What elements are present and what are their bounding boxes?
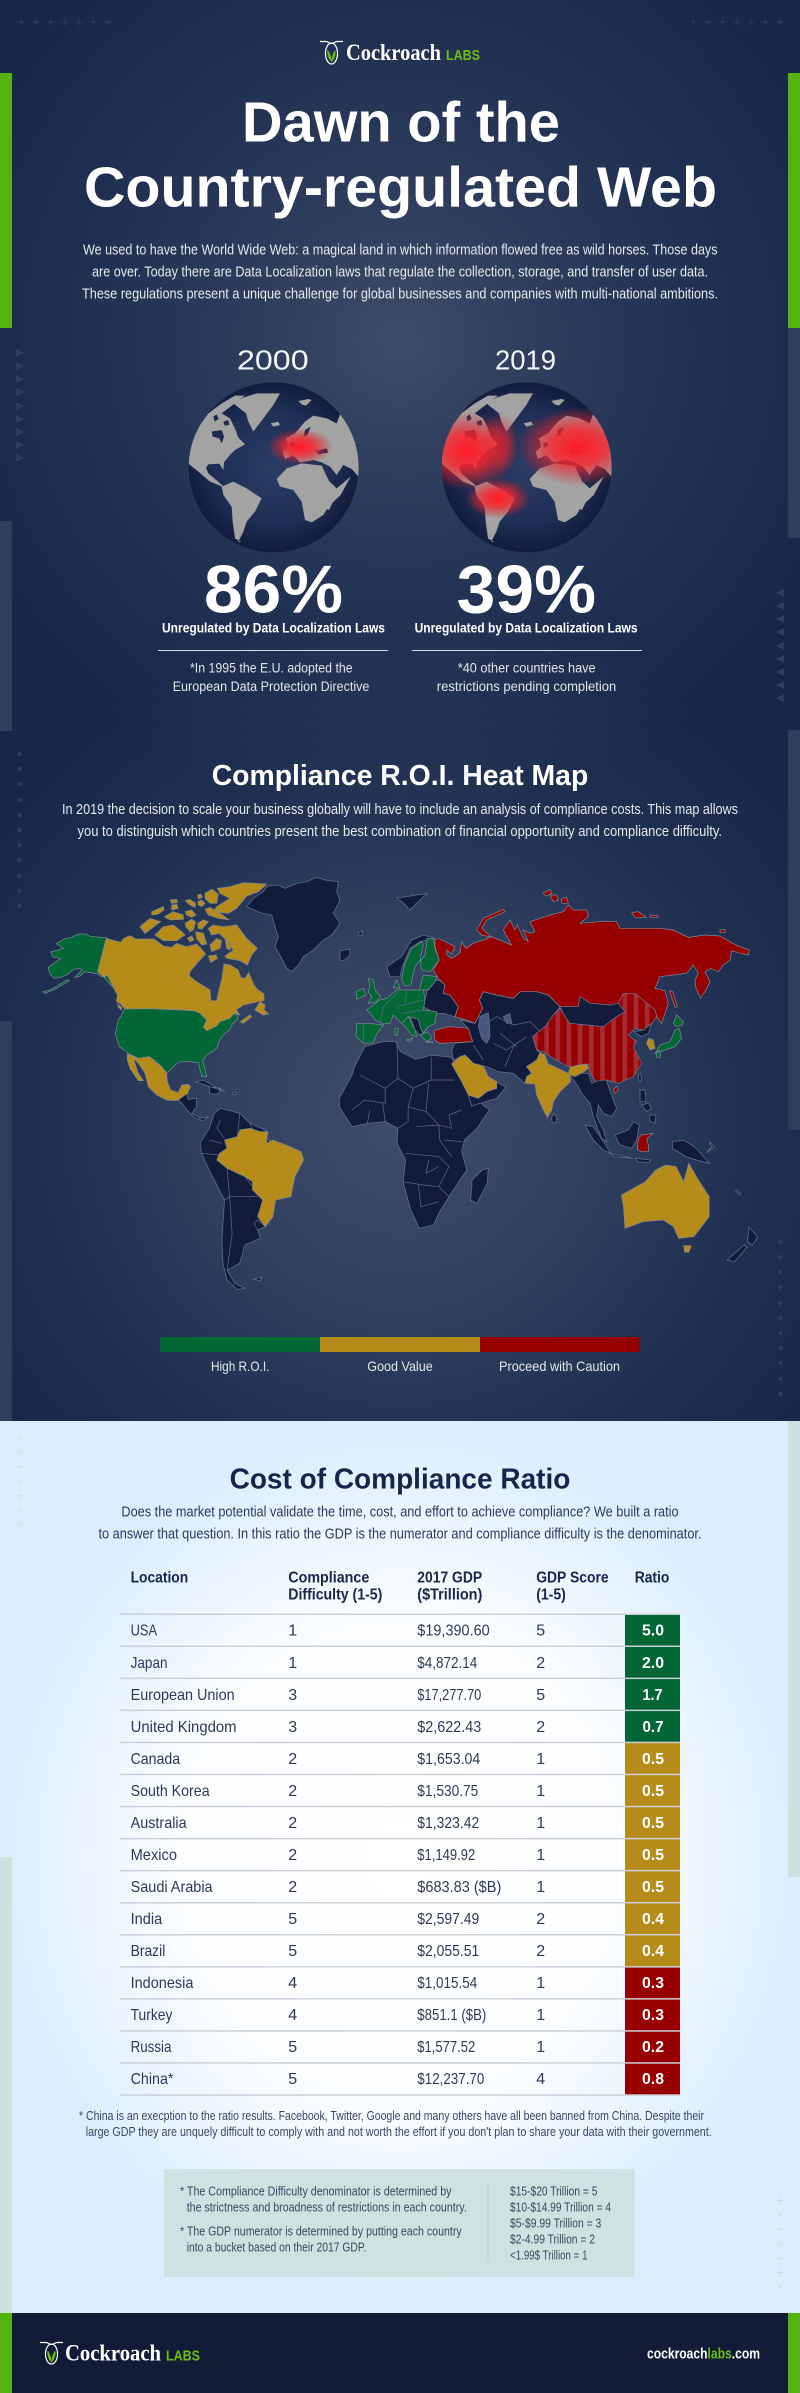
world heat map <box>43 877 758 1289</box>
row: Indonesia: Indonesia <box>131 1975 193 1992</box>
footnote: restrictions pending completion <box>437 679 616 694</box>
hainan <box>613 1086 618 1093</box>
greenland <box>247 877 340 972</box>
balkans <box>410 1017 427 1035</box>
legend labels: Good Value <box>367 1358 433 1374</box>
row: Australia <box>131 1815 664 1832</box>
gdp buckets: $2-4.99 Trillion = 2 <box>510 2232 595 2246</box>
legend labels <box>211 1358 620 1374</box>
row: Russia: $1,577.52 <box>417 2039 475 2056</box>
row: Russia: 1 <box>536 2039 545 2056</box>
methodology notes: the strictness and broadness of restrictions in each country. <box>187 2200 467 2214</box>
title: Dawn of the <box>242 91 560 155</box>
methodology notes: * The GDP numerator is determined by putting each country <box>180 2225 462 2239</box>
madagascar <box>470 1168 488 1203</box>
row: India: 5 <box>288 1911 297 1928</box>
row: USA <box>131 1623 664 1640</box>
row: Brazil: 0.4 <box>642 1943 664 1960</box>
row: India: 2 <box>536 1911 545 1928</box>
row: Canada <box>131 1751 664 1768</box>
iceland, svalbard <box>340 893 427 961</box>
table header: Location <box>131 1570 188 1587</box>
row: Saudi Arabia: $683.83 ($B) <box>417 1879 501 1896</box>
light background <box>0 1421 800 2313</box>
logo top <box>320 40 480 65</box>
africa <box>339 1042 490 1228</box>
footnote: *40 other countries have <box>458 661 596 676</box>
row: China <box>131 2071 664 2088</box>
table grid <box>120 1614 680 2096</box>
canada <box>98 883 269 1031</box>
row: Russia: Russia <box>131 2039 171 2056</box>
row: Russia: 0.2 <box>642 2039 664 2056</box>
stat 39%: 39% <box>457 552 596 628</box>
heading: heat map: Compliance R.O.I. Heat Map <box>212 760 588 792</box>
mexico <box>127 1054 191 1101</box>
row: China: $12,237.70 <box>417 2071 484 2088</box>
row: Brazil: 2 <box>536 1943 545 1960</box>
cost description: Does the market potential validate the time, cost, and effort to achieve compliance? We built a ratio <box>121 1504 679 1521</box>
row: European Union <box>131 1687 663 1704</box>
row: Australia: Australia <box>131 1815 187 1832</box>
belarus and ukraine <box>423 980 458 1017</box>
map: eurasia <box>340 889 749 1153</box>
new zealand, new caledonia <box>727 1190 758 1262</box>
row: Japan: 1 <box>288 1655 297 1672</box>
title <box>84 91 717 220</box>
methodology notes: into a bucket based on their 2017 GDP. <box>187 2241 366 2255</box>
row: Russia <box>131 2039 664 2056</box>
row: South Korea: 2 <box>288 1783 297 1800</box>
gdp buckets: <1.99$ Trillion = 1 <box>510 2248 588 2262</box>
row: Mexico: $1,149.92 <box>417 1847 475 1864</box>
row: United Kingdom: 2 <box>536 1719 545 1736</box>
ratio cells <box>625 1614 680 2095</box>
gdp buckets: $10-$14.99 Trillion = 4 <box>510 2200 611 2214</box>
china <box>533 993 657 1083</box>
table header: Compliance <box>288 1570 369 1587</box>
row: India <box>131 1911 664 1928</box>
row: Mexico: Mexico <box>131 1847 177 1864</box>
row: South Korea: $1,530.75 <box>417 1783 478 1800</box>
row: China: 4 <box>536 2071 545 2088</box>
central asia and middle east <box>452 992 560 1083</box>
row: Indonesia: $1,015.54 <box>417 1975 477 1992</box>
row: Canada: 2 <box>288 1751 297 1768</box>
row: Indonesia: 1 <box>536 1975 545 1992</box>
turkey <box>434 1027 473 1043</box>
row: Russia: 5 <box>288 2039 297 2056</box>
row: Japan: $4,872.14 <box>417 1655 477 1672</box>
row: Saudi Arabia <box>131 1879 664 1896</box>
panel: 2019 <box>412 344 642 694</box>
row: Japan <box>131 1655 664 1672</box>
row: United Kingdom: 3 <box>288 1719 297 1736</box>
row: China: China* <box>131 2071 174 2088</box>
row: Saudi Arabia: 0.5 <box>642 1879 664 1896</box>
row: European Union: $17,277.70 <box>417 1687 481 1704</box>
russia <box>433 889 749 1023</box>
row: Turkey: Turkey <box>131 2007 172 2024</box>
row: Australia: 1 <box>536 1815 545 1832</box>
south america <box>200 1108 304 1289</box>
row: Indonesia: 0.3 <box>642 1975 664 1992</box>
row: USA: 5.0 <box>642 1623 664 1640</box>
central america <box>178 1094 208 1121</box>
row: Brazil: Brazil <box>131 1943 165 1960</box>
stat caption: Unregulated by Data Localization Laws <box>415 621 638 636</box>
row: Japan: 2.0 <box>642 1655 664 1672</box>
footer logo <box>40 2340 200 2366</box>
row: Turkey: 1 <box>536 2007 545 2024</box>
gdp buckets: $5-$9.99 Trillion = 3 <box>510 2216 601 2230</box>
europe <box>356 938 439 1043</box>
row: United Kingdom: 0.7 <box>642 1719 664 1736</box>
table header: GDP Score <box>536 1570 609 1587</box>
icon: cockroach <box>40 2342 63 2364</box>
logo top: LABS <box>446 47 480 64</box>
heat map description <box>62 801 738 840</box>
row: South Korea <box>131 1783 664 1800</box>
dark background <box>0 0 800 1421</box>
usa <box>115 1009 237 1077</box>
cost description: to answer that question. In this ratio the GDP is the numerator and compliance difficulty is the denominator. <box>98 1526 702 1543</box>
cost description <box>98 1504 702 1543</box>
south korea <box>647 1038 655 1050</box>
panel: 2000 <box>158 344 388 694</box>
decorative marks dark section <box>16 18 784 1396</box>
china footnote: large GDP they are unquely difficult to comply with and not worth the effort if you don't plan to share your data with their government. <box>86 2125 712 2139</box>
brazil <box>217 1128 304 1227</box>
row: Saudi Arabia: Saudi Arabia <box>131 1879 213 1896</box>
norway <box>387 935 435 977</box>
row: European Union: 1.7 <box>642 1687 663 1704</box>
legend labels: Proceed with Caution <box>499 1358 620 1374</box>
website: cockroachlabs.com <box>647 2347 760 2363</box>
year 2000: 2000 <box>237 344 309 375</box>
saudi arabia <box>452 1055 497 1098</box>
footer logo: Cockroach <box>65 2340 161 2366</box>
row: Japan: 2 <box>536 1655 545 1672</box>
row: Mexico <box>131 1847 664 1864</box>
footnote <box>437 661 616 694</box>
row: South Korea: 0.5 <box>642 1783 664 1800</box>
india <box>525 1053 588 1117</box>
row: European Union: European Union <box>131 1687 235 1704</box>
globe 2000 <box>187 382 360 552</box>
table header: Ratio <box>635 1570 670 1587</box>
falklands <box>254 1277 262 1281</box>
heading: cost of compliance: Cost of Compliance Ratio <box>230 1463 570 1495</box>
row: Mexico: 2 <box>288 1847 297 1864</box>
row: Brazil <box>131 1943 664 1960</box>
row: Indonesia: 4 <box>288 1975 297 1992</box>
side strips dark section <box>0 73 800 1421</box>
row: Turkey: 0.3 <box>642 2007 664 2024</box>
oman and yemen <box>468 1082 506 1106</box>
table <box>120 1570 680 2096</box>
row: China: 5 <box>288 2071 297 2088</box>
map: americas north <box>43 877 340 1121</box>
north korea <box>633 1023 652 1037</box>
legend bar <box>160 1337 639 1352</box>
table header: Difficulty (1-5) <box>288 1586 382 1603</box>
alaska <box>43 934 113 993</box>
legend labels: High R.O.I. <box>211 1358 269 1374</box>
footer <box>0 2313 800 2393</box>
stat caption: Unregulated by Data Localization Laws <box>162 621 385 636</box>
year 2019: 2019 <box>495 344 556 375</box>
china footnote <box>79 2109 712 2139</box>
row: Turkey: $851.1 ($B) <box>417 2007 486 2024</box>
row: Japan: Japan <box>131 1655 168 1672</box>
row: Australia: 0.5 <box>642 1815 664 1832</box>
row: China: 0.8 <box>642 2071 664 2088</box>
footnote: *In 1995 the E.U. adopted the <box>190 661 353 676</box>
sulawesi <box>637 1133 653 1152</box>
footnote <box>173 661 369 694</box>
gdp buckets <box>510 2185 611 2262</box>
row: South Korea: South Korea <box>131 1783 210 1800</box>
table header: ($Trillion) <box>417 1586 482 1603</box>
gdp buckets: $15-$20 Trillion = 5 <box>510 2185 597 2199</box>
methodology box <box>164 2169 635 2277</box>
southeast asia <box>551 1073 656 1153</box>
sumatra, java, new guinea <box>610 1140 714 1163</box>
intro paragraph <box>82 242 718 302</box>
row: United Kingdom: United Kingdom <box>131 1719 237 1736</box>
row: USA: 5 <box>536 1623 545 1640</box>
row: South Korea: 1 <box>536 1783 545 1800</box>
row: Mexico: 1 <box>536 1847 545 1864</box>
row: USA: USA <box>131 1623 157 1640</box>
row: United Kingdom: $2,622.43 <box>417 1719 481 1736</box>
icon: cockroach <box>320 42 343 64</box>
row: India: 0.4 <box>642 1911 664 1928</box>
table header <box>131 1570 670 1603</box>
row: Saudi Arabia: 1 <box>536 1879 545 1896</box>
caribbean <box>196 1080 236 1094</box>
logo top: Cockroach <box>346 40 441 65</box>
globe 2019 <box>442 382 612 552</box>
methodology notes <box>180 2185 467 2255</box>
map legend <box>160 1337 639 1374</box>
row: Mexico: 0.5 <box>642 1847 664 1864</box>
row: USA: $19,390.60 <box>417 1623 490 1640</box>
mongolia <box>560 997 625 1027</box>
table header: 2017 GDP <box>417 1570 482 1587</box>
methodology notes: * The Compliance Difficulty denominator is determined by <box>180 2185 452 2199</box>
row: Indonesia <box>131 1975 664 1992</box>
row: USA: 1 <box>288 1623 297 1640</box>
title: Country-regulated Web <box>84 156 717 220</box>
row: India: $2,597.49 <box>417 1911 479 1928</box>
row: European Union: 5 <box>536 1687 545 1704</box>
stat 86%: 86% <box>204 552 343 628</box>
row: Canada: 1 <box>536 1751 545 1768</box>
row: India: India <box>131 1911 162 1928</box>
table header: (1-5) <box>536 1586 566 1603</box>
row: Saudi Arabia: 2 <box>288 1879 297 1896</box>
row: Canada: 0.5 <box>642 1751 664 1768</box>
map: south america, africa, oceania <box>200 1042 758 1289</box>
row: Brazil: 5 <box>288 1943 297 1960</box>
japan <box>655 1015 683 1057</box>
row: Australia: 2 <box>288 1815 297 1832</box>
row: Australia: $1,323.42 <box>417 1815 479 1832</box>
row: Canada: $1,653.04 <box>417 1751 480 1768</box>
row: European Union: 3 <box>288 1687 297 1704</box>
footnote: European Data Protection Directive <box>173 679 369 694</box>
footer logo: LABS <box>166 2348 200 2364</box>
row: Turkey <box>131 2007 664 2024</box>
row: Brazil: $2,055.51 <box>417 1943 479 1960</box>
row: Turkey: 4 <box>288 2007 297 2024</box>
australia <box>621 1163 709 1252</box>
row: Canada: Canada <box>131 1751 180 1768</box>
row: United Kingdom <box>131 1719 664 1736</box>
